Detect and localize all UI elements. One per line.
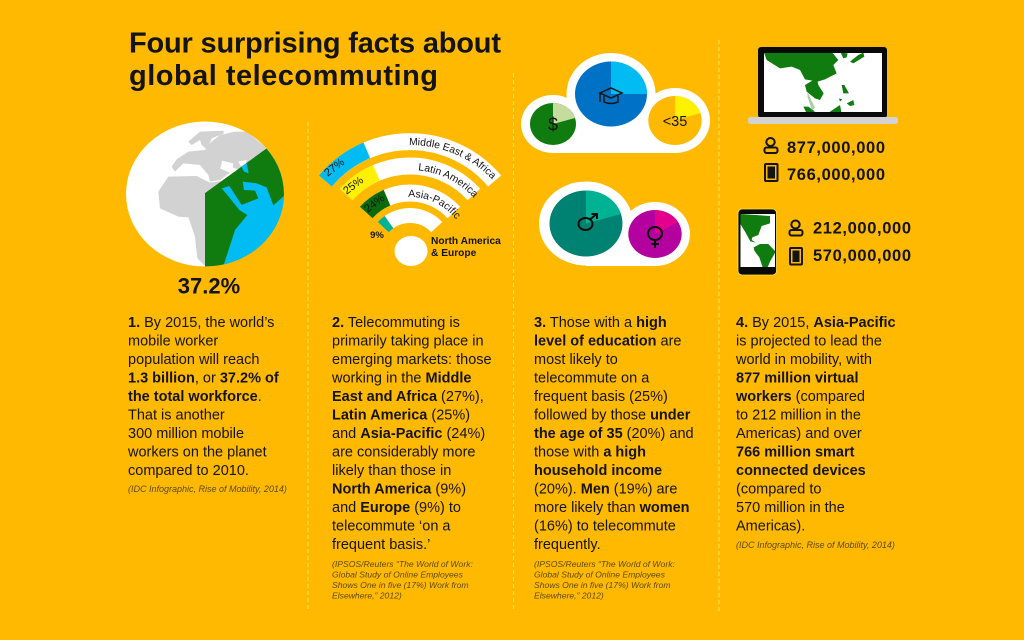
text block: fact 1: 300 million mobile <box>128 426 244 442</box>
pie: under 35: <35 <box>663 114 687 130</box>
icon: laptop with Asia map <box>748 47 898 124</box>
text block: fact 3: Global Study of Online Employees <box>534 570 666 580</box>
text block: fact 2: (IPSOS/Reuters “The World of Work: <box>332 559 473 569</box>
pie: education <box>575 62 647 126</box>
label: North America & Europe: North America <box>431 236 501 247</box>
text block: fact 4: 4. By 2015, Asia-Pacific <box>736 315 896 331</box>
label: Latin America: Latin America <box>418 163 477 198</box>
value: devices: 766,000,000 <box>787 166 885 184</box>
text block: fact 4: world in mobility, with <box>735 352 872 368</box>
pie: income <box>530 103 576 145</box>
icon: person <box>790 220 802 236</box>
text block: fact 2: East and Africa (27%), <box>332 389 484 405</box>
text block: fact 2: and Asia-Pacific (24%) <box>332 426 485 442</box>
wifi chart <box>318 133 501 266</box>
value: virtual workers: 212,000,000 <box>813 220 911 238</box>
label: North America & Europe: & Europe <box>431 248 477 259</box>
cloud: education, age, income <box>521 53 710 153</box>
text block: fact 2: working in the Middle <box>331 370 471 386</box>
text block: fact 3: the age of 35 (20%) and <box>534 426 694 442</box>
text block: fact 4: Americas). <box>736 518 805 534</box>
value: virtual workers: 877,000,000 <box>787 139 885 157</box>
icon: device <box>765 164 778 181</box>
text block: fact 2: 2. Telecommuting is <box>332 315 460 331</box>
text block: fact 3: (16%) to telecommute <box>534 518 676 534</box>
text block: fact 3: more likely than women <box>534 500 690 516</box>
value: devices: 570,000,000 <box>813 247 911 265</box>
title: Four surprising facts about <box>129 28 501 60</box>
text block: fact 4: Americas) and over <box>736 426 862 442</box>
label: Asia-Pacific: Asia-Pacific <box>408 190 460 219</box>
text block: fact 2: Shows One in five (17%) Work from <box>332 580 469 590</box>
title: global telecommuting <box>129 60 438 92</box>
label: 24%: 24% <box>362 192 387 215</box>
stats: Asia-Pacific <box>764 138 885 184</box>
icon: graduation cap <box>600 88 622 104</box>
text block: fact 3: (20%). Men (19%) are <box>534 482 677 498</box>
pie: under 35 <box>648 96 702 145</box>
text block: fact 3: Elsewhere,” 2012) <box>534 590 604 600</box>
label: 25%: 25% <box>341 174 366 197</box>
stats: Americas <box>790 220 911 265</box>
text block: fact 4: (compared to <box>736 482 821 498</box>
text block: fact 3: level of education are <box>534 334 681 350</box>
title <box>129 28 501 92</box>
text block: fact 1: (IDC Infographic, Rise of Mobility, 2014) <box>128 484 287 494</box>
icon: person <box>764 138 778 153</box>
text block: fact 4: 877 million virtual <box>736 370 858 386</box>
text block: fact 1: 1. By 2015, the world’s <box>128 315 274 331</box>
text block: fact 3: (IPSOS/Reuters “The World of Work: <box>534 559 675 569</box>
globe pie chart: 37.2% <box>126 122 284 266</box>
text block: fact 3: frequently. <box>534 537 601 553</box>
text block: fact 2: and Europe (9%) to <box>332 500 461 516</box>
text block: fact 1: That is another <box>128 408 225 424</box>
label: 27%: 27% <box>322 156 347 179</box>
text block: fact 3: frequent basis (25%) <box>534 389 668 405</box>
text block: fact 2: primarily taking place in <box>332 334 484 350</box>
text block: fact 4: connected devices <box>736 463 866 479</box>
text block: fact 1: the total workforce. <box>128 389 262 405</box>
icon: female symbol <box>648 227 662 248</box>
text block: fact 4: 766 million smart <box>736 444 855 460</box>
icon: device <box>790 248 802 264</box>
text block: fact 1: mobile worker <box>128 334 218 350</box>
text block: fact 2: likely than those in <box>332 463 451 479</box>
label: North America & Europe <box>431 236 501 259</box>
text block: fact 3: most likely to <box>534 352 618 368</box>
pie: income: $ <box>548 114 558 134</box>
text block: fact 4: to 212 million in the <box>736 408 861 424</box>
icon: phone with Americas map <box>738 209 776 275</box>
text block: fact 3: those with a high <box>534 444 646 460</box>
text block: fact 1 <box>127 315 287 494</box>
text block: fact 4: is projected to lead the <box>736 334 882 350</box>
text block: fact 3: Shows One in five (17%) Work from <box>534 580 671 590</box>
text block: fact 4 <box>735 315 896 550</box>
text block: fact 3: telecommute on a <box>534 370 650 386</box>
icon: male symbol <box>578 214 597 230</box>
text block: fact 1: workers on the planet <box>127 444 267 460</box>
text block: fact 1: population will reach <box>128 352 259 368</box>
text block: fact 1: 1.3 billion, or 37.2% of <box>128 370 279 386</box>
text block: fact 3 <box>534 315 694 600</box>
text block: fact 3: followed by those under <box>534 408 691 424</box>
text block: fact 3: household income <box>534 463 662 479</box>
text block: fact 2: telecommute ‘on a <box>332 518 451 534</box>
label: Middle East & Africa: Middle East & Africa <box>410 138 495 180</box>
cloud: men and women <box>539 182 690 266</box>
pie: men <box>550 190 622 256</box>
pie: women <box>628 210 682 258</box>
text block: fact 2: North America (9%) <box>332 482 466 498</box>
text block: fact 2: emerging markets: those <box>332 352 492 368</box>
text block: fact 4: workers (compared <box>735 389 865 405</box>
text block: fact 3: 3. Those with a high <box>534 315 667 331</box>
text block: fact 4: 570 million in the <box>736 500 845 516</box>
text block: fact 2: Global Study of Online Employees <box>332 570 464 580</box>
label: 9%: 9% <box>370 230 384 241</box>
text block: fact 4: (IDC Infographic, Rise of Mobility, 2014) <box>736 540 895 550</box>
wifi dot <box>394 236 428 266</box>
text block: fact 2: frequent basis.’ <box>332 537 430 553</box>
globe value: 37.2% <box>178 274 240 298</box>
text block: fact 2 <box>331 315 492 600</box>
text block: fact 1: compared to 2010. <box>128 463 249 479</box>
text block: fact 2: Elsewhere,” 2012) <box>332 590 402 600</box>
text block: fact 2: Latin America (25%) <box>332 408 470 424</box>
text block: fact 2: are considerably more <box>332 444 475 460</box>
